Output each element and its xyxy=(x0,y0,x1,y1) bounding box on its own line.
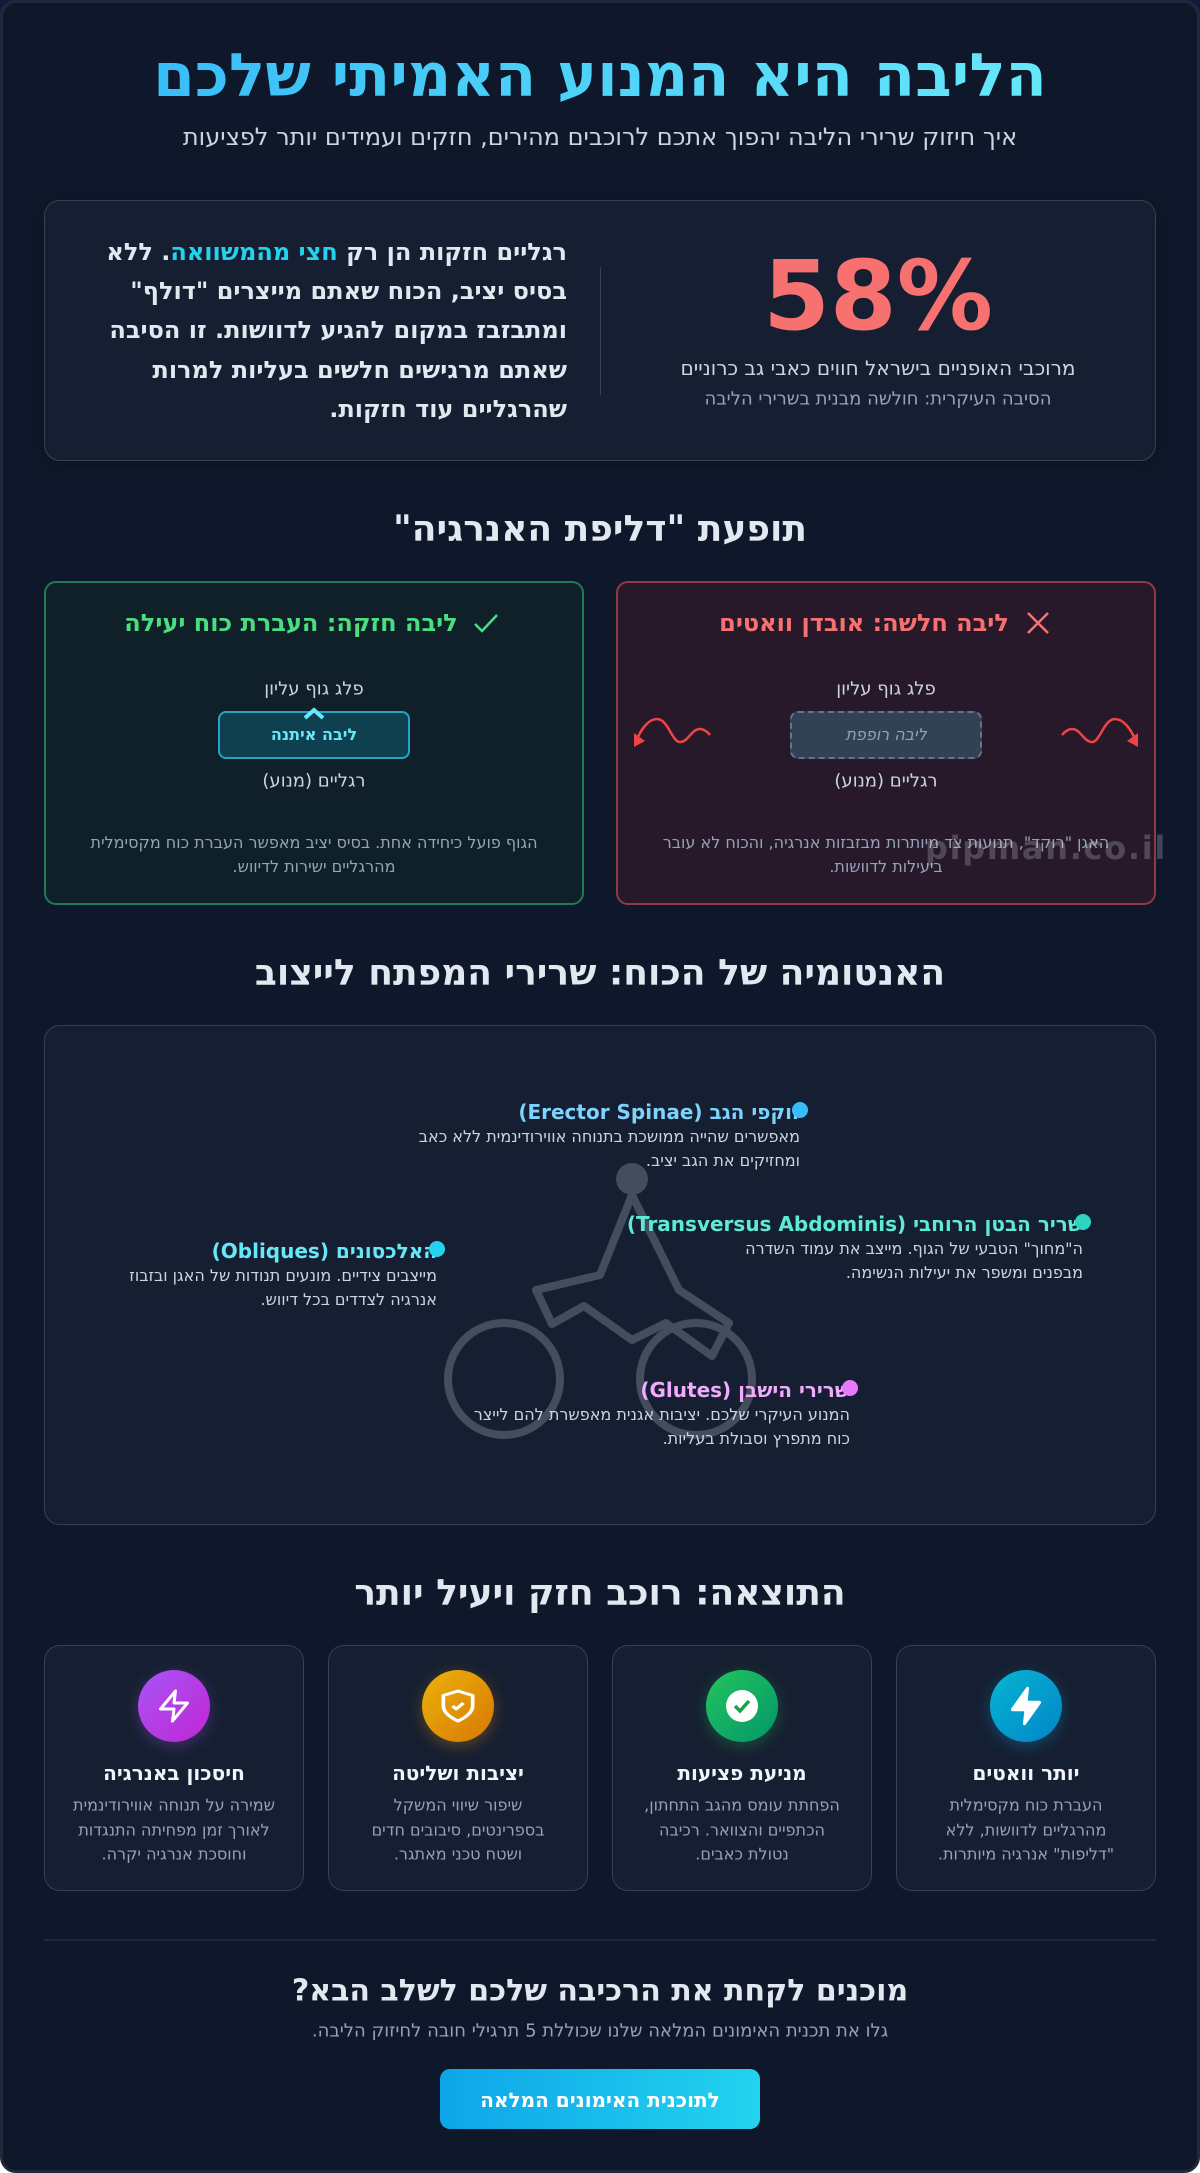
statistic: 58%: 58% xyxy=(763,240,993,352)
strong core upper body label: פלג גוף עליון xyxy=(264,678,364,700)
panel: anatomy xyxy=(44,1025,1156,1525)
card text: more watts: העברת כוח מקסימלית xyxy=(950,1795,1102,1814)
card title: stability: יציבות ושליטה xyxy=(392,1761,524,1785)
icon: outline bolt xyxy=(138,1670,210,1742)
statistic caption: מרוכבי האופניים בישראל חווים כאבי גב כרוניים xyxy=(681,356,1075,380)
icon: check mark xyxy=(474,614,498,633)
label: obliques: האלכסונים (Obliques) xyxy=(212,1239,437,1263)
weak core legs label: רגליים (מנוע) xyxy=(834,770,938,792)
label: erector spinae: ומחזיקים את הגב יציב. xyxy=(646,1151,800,1170)
weak core box: ליבה רופפת xyxy=(845,725,927,744)
subtitle: איך חיזוק שרירי הליבה יהפוך אתכם לרוכבים מהירים, חזקים ועמידים יותר לפציעות xyxy=(183,123,1017,151)
weak core box xyxy=(790,711,982,759)
strong core description: מהרגליים ישירות לדיווש. xyxy=(233,857,395,876)
card text: injury prevention: הכתפיים והצוואר. רכיבה xyxy=(659,1820,825,1839)
weak core description: ביעילות לדוושות. xyxy=(829,857,943,876)
card text: more watts xyxy=(938,1795,1114,1863)
label: erector spinae: זוקפי הגב (Erector Spinae) xyxy=(518,1100,800,1124)
strong core heading: ליבה חזקה: העברת כוח יעילה xyxy=(124,609,458,637)
statistic sub-caption: הסיבה העיקרית: חולשה מבנית בשרירי הליבה xyxy=(705,388,1051,410)
card text: energy saving: וחוסכת אנרגיה יקרה. xyxy=(102,1844,246,1863)
intro text block: ומתבזבז במקום להגיע לדוושות. זו הסיבה xyxy=(109,316,567,344)
call to action text: גלו את תכנית האימונים המלאה שלנו שכוללת 5 תרגילי חובה לחיזוק הליבה. xyxy=(312,2020,888,2042)
label: glutes: המנוע העיקרי שלכם. יציבות אגנית מאפשרת להם לייצר xyxy=(474,1405,850,1424)
panel: strong core xyxy=(44,581,584,905)
call to action button xyxy=(440,2069,760,2129)
card text: stability xyxy=(372,1795,544,1863)
icon: up chevron xyxy=(304,708,324,720)
label: erector spinae xyxy=(419,1100,800,1170)
panel: key statistic xyxy=(44,200,1156,461)
marker: erector spinae xyxy=(792,1102,808,1118)
card text: injury prevention: הפחתת עומס מהגב התחתון, xyxy=(644,1795,840,1814)
call to action button: לתוכנית האימונים המלאה xyxy=(480,2088,720,2112)
card: stability xyxy=(328,1645,588,1891)
weak core description: האגן "רוקד", תנועות צד מיותרות מבזבזות אנרגיה, והכוח לא עובר xyxy=(663,833,1109,852)
panel: weak core xyxy=(616,581,1156,905)
icon: X mark xyxy=(1027,612,1049,634)
card text: stability: ושטח טכני מאתגר. xyxy=(394,1844,522,1863)
label: transversus abdominis: ה"מחוך" הטבעי של הגוף. מייצב את עמוד השדרה xyxy=(745,1239,1083,1258)
heading: result: התוצאה: רוכב חזק ויעיל יותר xyxy=(354,1572,846,1614)
weak core heading: ליבה חלשה: אובדן וואטים xyxy=(719,609,1009,637)
card text: energy saving xyxy=(73,1795,275,1863)
card: energy saving xyxy=(44,1645,304,1891)
marker: glutes xyxy=(842,1380,858,1396)
card text: more watts: מהרגליים לדוושות, ללא xyxy=(946,1820,1106,1839)
label: glutes: כוח מתפרץ וסבולת בעליות. xyxy=(663,1429,850,1448)
card title: more watts: יותר וואטים xyxy=(972,1761,1080,1785)
card text: injury prevention: נטולת כאבים. xyxy=(695,1844,789,1863)
card text: energy saving: שמירה על תנוחה אווירודינמית xyxy=(73,1795,275,1814)
card text: more watts: "דליפות" אנרגיה מיותרות. xyxy=(938,1844,1114,1863)
strong core box xyxy=(218,711,410,759)
arrow: right energy leak xyxy=(1061,718,1138,747)
card text: injury prevention xyxy=(644,1795,840,1863)
marker: transversus abdominis xyxy=(1075,1214,1091,1230)
weak core description xyxy=(663,833,1109,876)
card text: stability: שיפור שיווי המשקל xyxy=(394,1795,522,1814)
arrow: left energy leak xyxy=(634,718,711,747)
label: obliques xyxy=(129,1239,437,1309)
label: obliques: מייצבים צידיים. מונעים תנודות של האגן ובזבוז xyxy=(129,1266,437,1285)
icon: shield xyxy=(422,1670,494,1742)
strong core legs label: רגליים (מנוע) xyxy=(262,770,366,792)
label: erector spinae: מאפשרים שהייה ממושכת בתנוחה אווירודינמית ללא כאב xyxy=(419,1127,800,1146)
weak core upper body label: פלג גוף עליון xyxy=(836,678,936,700)
watermark: pipman.co.il xyxy=(925,829,1167,867)
label: transversus abdominis xyxy=(627,1212,1083,1282)
intro text block: רגליים חזקות הן רק חצי מהמשוואה. ללא xyxy=(106,238,567,266)
card text: stability: בספרינטים, סיבובים חדים xyxy=(372,1820,544,1839)
strong core box: ליבה איתנה xyxy=(271,725,357,744)
call to action heading: מוכנים לקחת את הרכיבה שלכם לשלב הבא? xyxy=(292,1974,908,2008)
icon: check badge xyxy=(706,1670,778,1742)
card text: energy saving: לאורך זמן מפחיתה התנגדות xyxy=(78,1820,270,1839)
intro text block: שהרגליים עוד חזקות. xyxy=(329,395,567,423)
label: obliques: אנרגיה לצדדים בכל דיווש. xyxy=(260,1290,437,1309)
strong core description: הגוף פועל כיחידה אחת. בסיס יציב מאפשר העברת כוח מקסימלית xyxy=(90,833,538,852)
label: glutes xyxy=(474,1378,850,1448)
heading: anatomy: האנטומיה של הכוח: שרירי המפתח לייצוב xyxy=(255,952,945,994)
card: injury prevention xyxy=(612,1645,872,1891)
title: הליבה היא המנוע האמיתי שלכם xyxy=(153,41,1047,111)
intro text block: בסיס יציב, הכוח שאתם מייצרים "דולף" xyxy=(130,277,567,305)
intro text block xyxy=(106,238,567,423)
strong core description xyxy=(90,833,538,876)
intro text block: שאתם מרגישים חלשים בעליות למרות xyxy=(152,356,567,384)
icon: solid bolt xyxy=(990,1670,1062,1742)
label: transversus abdominis: שריר הבטן הרוחבי (Transversus Abdominis) xyxy=(627,1212,1083,1236)
label: transversus abdominis: מבפנים ומשפר את יעילות הנשימה. xyxy=(846,1263,1083,1282)
heading: energy leak: תופעת "דליפת האנרגיה" xyxy=(393,508,807,550)
label: glutes: שרירי הישבן (Glutes) xyxy=(640,1378,850,1402)
card title: energy saving: חיסכון באנרגיה xyxy=(103,1761,245,1785)
marker: obliques xyxy=(429,1241,445,1257)
card: more watts xyxy=(896,1645,1156,1891)
card title: injury prevention: מניעת פציעות xyxy=(677,1761,807,1785)
